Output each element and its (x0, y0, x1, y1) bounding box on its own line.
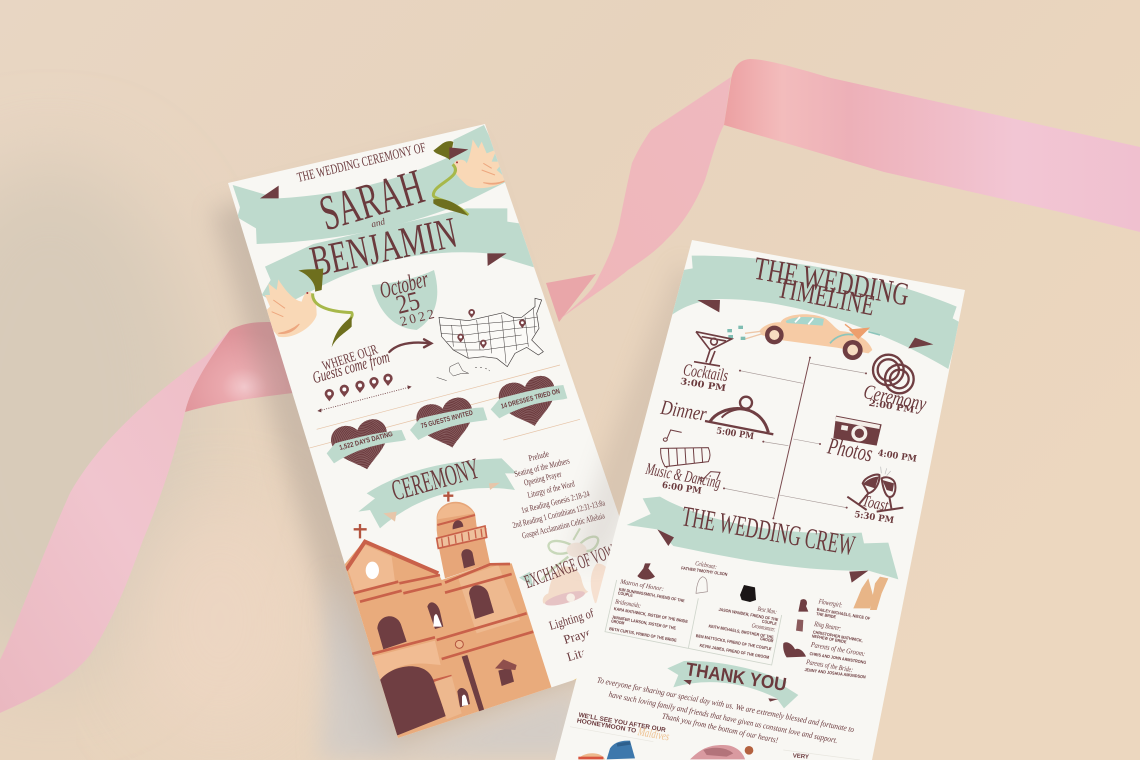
event: music and dancing (644, 459, 722, 497)
crew text: Parents of the Bride: (805, 657, 854, 674)
crew text: Matron of Honor: (619, 578, 664, 593)
portal column (435, 676, 462, 719)
arrow: to map (389, 339, 431, 352)
crew text: JENNY AND JOSHUA AMUNDSON (804, 667, 866, 680)
map pins (457, 309, 526, 349)
heading: ceremony of: THE WEDDING CEREMONY OF (296, 140, 427, 185)
crew text (609, 560, 871, 680)
ribbon: rising strand (559, 77, 731, 320)
ribbon: fold under left strip (185, 322, 293, 412)
church tower (437, 502, 490, 578)
crew text: KEVIN JAMES, FRIEND OF THE GROOM (699, 643, 770, 660)
light gable (348, 545, 395, 593)
word: and: and (370, 217, 387, 230)
left card shadow (212, 140, 640, 750)
icon: tuxedo (740, 585, 756, 602)
crew text: JASON WANDER, FRIEND OF THE (718, 607, 779, 622)
event: cocktails: 3:00 PM (680, 377, 727, 394)
stat: dresses tried on (490, 376, 568, 426)
event: photos: 4:00 PM (877, 449, 917, 465)
text block: order of service (511, 448, 606, 541)
stripes (353, 564, 533, 682)
banner: thank you (667, 658, 798, 708)
text block: thanks message: Thank you from the bottom of our hearts! (661, 711, 779, 745)
illustration: yellow flowers (573, 678, 576, 680)
timeline spine and arrows (723, 357, 867, 519)
crew text: Parents of the Groom: (809, 640, 866, 658)
crew text: KEITH MICHAELS, BROTHER OF THE (708, 623, 774, 640)
text block: vows list: Litany (565, 641, 601, 664)
background tone: grey upper left (0, 160, 200, 680)
crew text: KIM DUNNINGSMITH, FRIEND OF THE (618, 587, 685, 603)
crew text: KARA MATHWICK, SISTER OF THE BRIDE (613, 606, 688, 624)
event: dinner: Dinner (658, 397, 709, 426)
date text: October (377, 266, 432, 304)
background tone: peach lower left (130, 500, 310, 740)
crosses (354, 492, 453, 538)
text block: order of service: Gospel Acclamation Celtic Alleluia (521, 510, 606, 541)
icon: pink car (690, 745, 753, 759)
text block: vows list (548, 608, 593, 662)
event: cocktails: Cocktails (682, 360, 729, 385)
lower shading below left card (320, 570, 585, 760)
icon: cocktail glass (694, 332, 732, 366)
crew text: Bridesmaids: (615, 598, 641, 610)
event: ceremony (862, 381, 929, 416)
banner fold triangles (260, 186, 507, 266)
church body (340, 542, 553, 742)
date text (380, 274, 434, 326)
text block: order of service: Seating of the Mothers (513, 455, 571, 479)
text block: order of service: Opening Prayer (523, 469, 562, 488)
crew text: COUPLE (617, 590, 633, 598)
icon: camera (833, 416, 882, 446)
date shield (372, 270, 437, 330)
event: dinner (658, 397, 755, 442)
heading: the wedding crew: THE WEDDING CREW (679, 500, 857, 562)
event: ceremony: 2:00 PM (868, 399, 915, 416)
event: toast (854, 491, 895, 526)
heading: the wedding timeline (751, 251, 912, 322)
light lower panel (373, 641, 441, 680)
timeline fold triangles (697, 300, 933, 348)
heading: honeymoon (576, 712, 671, 743)
crew: box lines (605, 580, 782, 665)
banner: upper (233, 125, 510, 244)
banner: ceremony (358, 453, 517, 528)
pier (462, 655, 485, 714)
event: music and dancing: Music & Dancing (644, 459, 722, 492)
stat: days dating: 1,522 DAYS DATING (339, 431, 394, 452)
heading: the wedding timeline: TIMELINE (775, 272, 877, 322)
crew text: GROOM (760, 636, 774, 643)
crew text: COUPLE (761, 619, 777, 626)
heading: where our guests come from: WHERE OUR (321, 342, 380, 374)
card sheet (555, 240, 965, 760)
icon: parents (783, 642, 806, 657)
crew text: CHRISTOPHER MATHWICK, (812, 629, 863, 643)
heading: honeymoon: Maldives (636, 724, 671, 743)
text block: order of service: 2nd Reading 1 Corinthians 12:31-13:8a (511, 497, 606, 530)
banner: thank you: THANK YOU (684, 658, 788, 695)
name: Sarah: SARAH (313, 158, 430, 241)
text block: order of service: 1st Reading Genesis 2:18-24 (520, 488, 591, 515)
crew text: Best Man: (757, 606, 777, 616)
gable trim (346, 542, 438, 573)
crew text: BETH CURTIS, FRIEND OF THE BRIDE (609, 626, 677, 643)
text block: vows list: Prayer (562, 624, 598, 647)
icon: wedding rings (873, 355, 914, 393)
main door (380, 666, 446, 738)
banner: timeline (672, 256, 960, 369)
icon: flower girl (798, 599, 808, 612)
text block: vows list: Lighting of the Unity (547, 594, 635, 633)
panel: right card (555, 240, 965, 760)
crew text: CHRIS AND JOHN ARMSTRONG (809, 651, 867, 665)
brick panel (458, 565, 520, 633)
right card shadow (570, 260, 720, 560)
heading: exchange of vows: EXCHANGE OF VOWS (522, 539, 623, 593)
bell window (498, 667, 514, 686)
event: photos: Photos (825, 433, 875, 467)
crew text: THE BRIDE (816, 611, 836, 619)
ribbon: fold behind cards (546, 274, 596, 322)
icon: dove top right (433, 139, 507, 216)
crew text: JENNIFER LARSON, SISTER OF THE (611, 614, 676, 631)
stat: days dating (326, 419, 406, 470)
crew fold triangles (657, 529, 868, 583)
windows (377, 520, 517, 738)
icon: cloche (705, 397, 773, 434)
stat: guests invited: 75 GUESTS INVITED (420, 410, 474, 430)
crew text: FATHER TIMOTHY OLSON (681, 565, 728, 577)
stat: guests invited (410, 398, 488, 448)
banner: crew (627, 497, 898, 579)
name: Benjamin: BENJAMIN (306, 208, 461, 286)
icon: bridal party silhouettes (853, 577, 888, 610)
oval window (366, 562, 379, 579)
dotted arrow (317, 385, 412, 412)
crew text: Celebrant: (695, 560, 717, 571)
banner: lower (262, 208, 534, 307)
illustration: church (340, 492, 553, 742)
crew text: NEPHEW OF BRIDE (811, 633, 847, 644)
heading: where our guests come from: Guests come from (310, 347, 392, 387)
icon row: five pins (325, 374, 393, 401)
event: dinner: 5:00 PM (716, 426, 755, 442)
stat: dresses tried on: 14 DRESSES TRIED ON (500, 388, 561, 411)
event: toast: 5:30 PM (854, 510, 895, 526)
map: United States (437, 298, 543, 381)
heading: where our guests come from (313, 345, 390, 383)
heading: honeymoon: HOONEYMOON TO (576, 717, 637, 735)
map: Alaska and Hawaii (437, 363, 490, 381)
date text: 2022 (398, 305, 438, 329)
text block: order of service: Prelude (527, 448, 550, 463)
panel: left card (228, 124, 620, 738)
text block: order of service: Liturgy of the Word (526, 478, 576, 500)
ribbon: upper right band (724, 59, 1140, 232)
text block: thanks message: To everyone for sharing our special day with us. We are extremely blessed and fortunate to (596, 675, 855, 734)
text block: thanks message: have such loving family and friends that have given us constant love and support. (608, 690, 838, 745)
heading: the wedding timeline: THE WEDDING (751, 251, 912, 313)
balcony (437, 526, 487, 548)
icon: dove bottom left (265, 268, 352, 347)
statues (433, 614, 468, 706)
crew text: Groomsmen: (751, 622, 776, 633)
icon: wedding bells (542, 528, 611, 609)
heading: honeymoon: WE'LL SEE YOU AFTER OUR (578, 712, 667, 734)
event: ceremony: Ceremony (862, 381, 929, 416)
banner: ceremony: CEREMONY (388, 453, 483, 507)
crew text: BAILEY MICHAELS, NIECE OF (816, 607, 871, 621)
icon: dress (637, 563, 655, 580)
crew text: GROOM (611, 618, 625, 626)
date text: 25 (393, 285, 423, 320)
icon: luggage and hat (578, 741, 635, 759)
icon: vintage car (727, 314, 880, 360)
event: toast: Toast (861, 491, 890, 515)
crew text: Ring Bearer: (813, 619, 842, 633)
icon: bride outline (696, 577, 707, 593)
heading: exchange of vows (519, 544, 612, 588)
crew text: Flowergirl: (817, 596, 843, 609)
icon: ring bearer (796, 619, 803, 632)
crew text: BEN MATTOCKS, FRIEND OF THE COUPLE (695, 633, 772, 651)
icon: piano and notes (661, 430, 720, 481)
event: cocktails (680, 360, 729, 394)
event: photos (825, 433, 917, 467)
ribbon: lower left strip (0, 330, 230, 713)
icon: champagne flutes (847, 467, 903, 512)
event: music and dancing: 6:00 PM (661, 481, 702, 497)
card sheet (228, 124, 665, 738)
